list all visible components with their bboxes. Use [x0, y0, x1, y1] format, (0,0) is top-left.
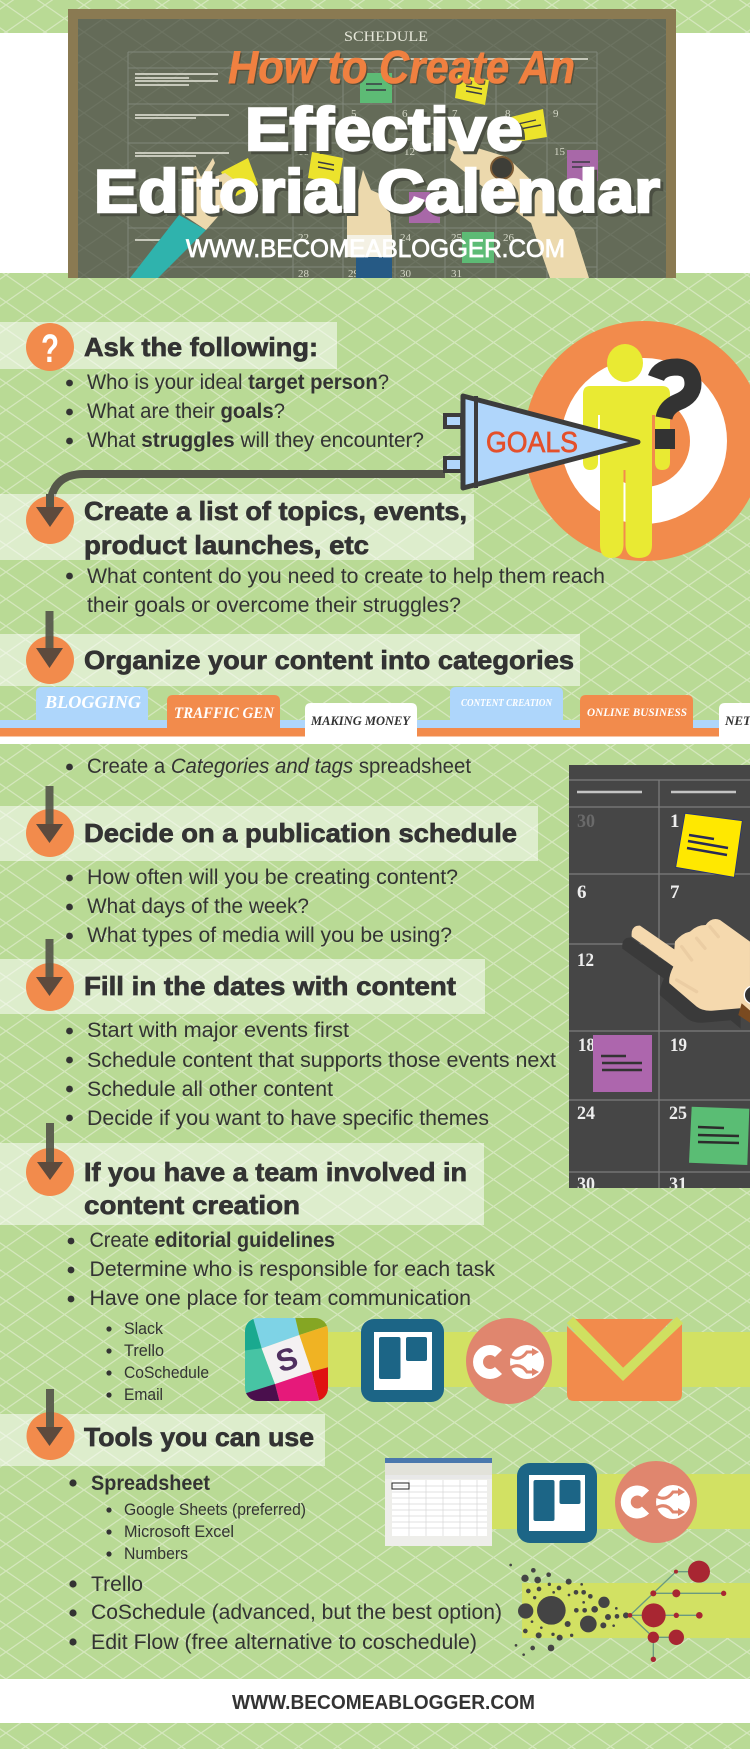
illustration: dots and network graph	[509, 1561, 750, 1662]
pennant: goals: GOALS	[486, 427, 578, 459]
board illustration: 8	[505, 108, 511, 120]
icon: question mark circle: ?	[41, 327, 59, 371]
heading band	[0, 634, 580, 686]
heading band	[0, 1143, 484, 1225]
tab: networking	[719, 703, 750, 744]
bullet list: Google Sheets (preferred)	[124, 1501, 306, 1519]
board illustration: 12	[404, 146, 415, 158]
icon: arrow circle	[26, 611, 74, 684]
question mark	[655, 367, 693, 449]
bullet: categories and tags: Create a Categories and tags spreadsheet	[87, 755, 471, 778]
tool icons row: team communication	[243, 1317, 750, 1404]
icon: trello	[517, 1463, 597, 1543]
bullet list: Trello	[91, 1573, 143, 1596]
bullet list: What are their goals?	[87, 400, 285, 423]
bullet list: What days of the week?	[87, 895, 309, 918]
board illustration: 30	[400, 268, 412, 280]
sub bullet list: Email	[124, 1386, 163, 1404]
heading band	[0, 1414, 325, 1466]
pennant: goals	[445, 396, 638, 488]
tool icons row: spreadsheets and apps	[385, 1458, 750, 1546]
illustration: dark calendar with pointing hand: 30	[577, 811, 595, 832]
white header band	[0, 33, 750, 273]
bullet list	[68, 1229, 495, 1310]
board illustration: 9	[553, 108, 559, 120]
icon: question mark circle	[26, 323, 74, 371]
bullet list: Decide if you want to have specific themes	[87, 1107, 489, 1130]
footer url: WWW.BECOMEABLOGGER.COM	[232, 1692, 535, 1714]
icon: pointing hand	[622, 919, 750, 1029]
bullet list: Edit Flow (free alternative to coschedule)	[91, 1631, 477, 1654]
bullet list	[66, 866, 458, 947]
tab: traffic gen	[167, 695, 280, 736]
heading band	[0, 322, 337, 369]
bullet list: Start with major events first	[87, 1019, 349, 1042]
heading: Organize your content into categories	[84, 645, 574, 675]
header: chalkboard schedule illustration with title	[68, 9, 676, 280]
illustration: dark calendar with pointing hand: 31	[669, 1174, 687, 1195]
heading band	[0, 494, 474, 560]
title line 3: Editorial Calendar	[97, 161, 663, 228]
bullet list: Microsoft Excel	[124, 1523, 234, 1541]
panel: decide on publication schedule	[0, 786, 538, 947]
illustration: target with person and question mark	[524, 321, 750, 561]
bullet list	[69, 1472, 502, 1654]
heading: Decide on a publication schedule	[84, 818, 517, 848]
category tabs	[0, 687, 750, 744]
person figure	[583, 344, 670, 558]
illustration: dark calendar with pointing hand: 1	[670, 811, 680, 832]
bullet list	[66, 371, 424, 452]
heading: Ask the following:	[84, 332, 318, 362]
arrow: curved connector from pennant to step 2	[50, 474, 445, 510]
heading band	[0, 959, 485, 1014]
heading	[84, 496, 467, 560]
icon: arrow circle	[26, 786, 74, 857]
title line 2: Effective	[245, 96, 523, 163]
heading: Fill in the dates with content	[84, 971, 456, 1001]
bullet list	[66, 565, 605, 617]
bullet list: What types of media will you be using?	[87, 924, 452, 947]
heading	[84, 1157, 467, 1220]
board illustration: 24	[400, 232, 412, 244]
board illustration: 28	[298, 268, 310, 280]
title line 3: Editorial Calendar	[94, 158, 660, 225]
bullet list: Schedule content that supports those events next	[87, 1049, 556, 1072]
illustration: dark calendar with pointing hand	[569, 765, 750, 1195]
tab: traffic gen: TRAFFIC GEN	[174, 705, 275, 722]
tab: blogging: BLOGGING	[44, 692, 141, 712]
illustration: dark calendar with pointing hand: 7	[670, 882, 680, 903]
bullet list: Create editorial guidelines	[90, 1229, 335, 1252]
board illustration	[68, 9, 676, 280]
bullet list: CoSchedule (advanced, but the best option)	[91, 1601, 502, 1624]
board illustration: 5	[351, 108, 357, 120]
board illustration: 15	[554, 146, 566, 158]
panel: fill in the dates	[0, 939, 556, 1130]
icon: arrow circle	[26, 939, 74, 1011]
board illustration: 26	[503, 232, 514, 244]
heading band	[0, 806, 538, 861]
illustration: dark calendar with pointing hand: 19	[670, 1035, 687, 1056]
bullet list	[66, 1019, 556, 1130]
board illustration: 25	[451, 232, 462, 244]
illustration: dark calendar with pointing hand: 12	[577, 950, 594, 971]
heading: If you have a team involved in	[84, 1157, 467, 1187]
illustration: dark calendar with pointing hand: 24	[577, 1103, 595, 1124]
footer band	[0, 1679, 750, 1723]
tab: making money: MAKING MONEY	[310, 713, 411, 728]
header url: WWW.BECOMEABLOGGER.COM	[186, 235, 565, 263]
board illustration: 10	[298, 146, 310, 158]
illustration: dark calendar with pointing hand: 30	[577, 1174, 595, 1195]
sub bullet list: Trello	[124, 1342, 164, 1360]
bullet list: Who is your ideal target person?	[87, 371, 389, 394]
title line 1: How to Create An	[230, 42, 576, 94]
panel: team involved	[0, 1123, 495, 1404]
board illustration: SCHEDULE	[344, 29, 428, 45]
tab: online business: ONLINE BUSINESS	[587, 705, 687, 719]
heading: content creation	[84, 1190, 300, 1220]
bullet list: What content do you need to create to help them reach	[87, 565, 605, 588]
board illustration: 29	[348, 268, 360, 280]
icon: spreadsheet screenshot	[385, 1458, 492, 1546]
illustration: dark calendar with pointing hand: 25	[669, 1103, 687, 1124]
board illustration: 6	[402, 108, 408, 120]
heading: Create a list of topics, events,	[84, 496, 467, 526]
sub bullet list	[106, 1320, 209, 1404]
icon: arrow circle	[26, 494, 74, 544]
bullet list: their goals or overcome their struggles?	[87, 594, 461, 617]
sub bullet list: CoSchedule	[124, 1364, 209, 1382]
illustration: dark calendar with pointing hand: 6	[577, 882, 586, 903]
board illustration: 7	[452, 108, 458, 120]
panel: ask the following	[0, 322, 424, 452]
bullet list: Spreadsheet	[91, 1472, 210, 1495]
note: purple	[593, 1035, 652, 1092]
tab: content creation	[450, 687, 563, 722]
icon: arrow circle	[26, 1123, 74, 1196]
board illustration: 31	[451, 268, 462, 280]
bullet list: Numbers	[124, 1545, 188, 1563]
bullet list: Schedule all other content	[87, 1078, 333, 1101]
tab: content creation: CONTENT CREATION	[461, 697, 553, 709]
icon: slack	[243, 1317, 330, 1403]
note: yellow	[676, 813, 742, 877]
icon: coschedule	[466, 1318, 552, 1404]
board illustration: 23	[348, 232, 360, 244]
icon: slack: S	[272, 1340, 302, 1379]
panel: organize into categories	[0, 611, 580, 686]
panel: create a list	[0, 494, 605, 617]
heading: Tools you can use	[84, 1422, 314, 1452]
icon: arrow circle	[26, 1389, 74, 1460]
board illustration: 22	[298, 232, 309, 244]
icon: coschedule	[615, 1461, 697, 1543]
sub bullet list: Slack	[124, 1320, 164, 1338]
tab: making money	[305, 703, 417, 744]
bullet list: How often will you be creating content?	[87, 866, 458, 889]
icon: trello	[361, 1319, 444, 1402]
bullet list: Have one place for team communication	[90, 1287, 471, 1310]
heading: product launches, etc	[84, 530, 369, 560]
bullet list: What struggles will they encounter?	[87, 429, 424, 452]
title line 2: Effective	[248, 99, 526, 166]
tab: blogging	[36, 687, 148, 722]
title line 1: How to Create An	[228, 41, 575, 93]
bullet list: Determine who is responsible for each task	[90, 1258, 495, 1281]
icon: envelope	[567, 1319, 682, 1401]
note: green	[689, 1107, 749, 1165]
tab: online business	[580, 695, 693, 736]
panel: tools you can use	[0, 1389, 502, 1654]
illustration: dark calendar with pointing hand: 18	[578, 1035, 595, 1056]
